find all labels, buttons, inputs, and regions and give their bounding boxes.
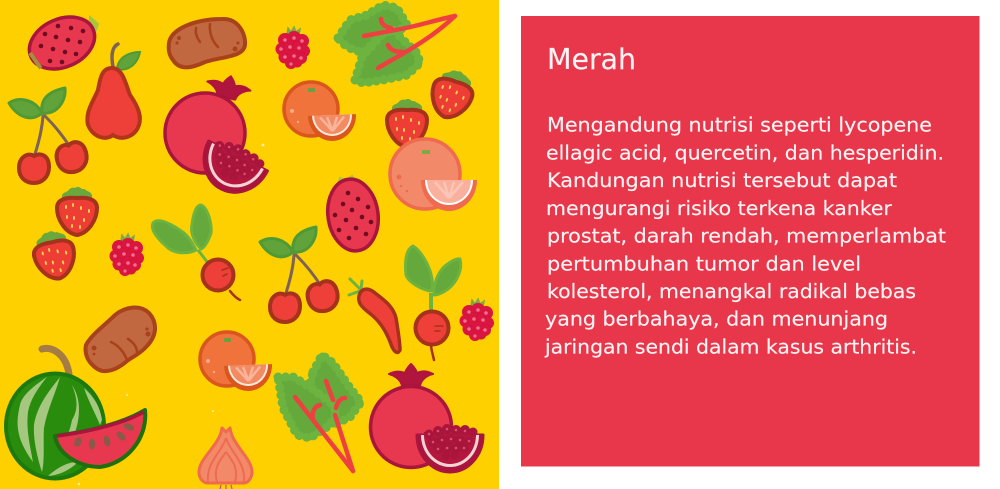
icon: strawberry left upper [57,188,97,235]
icon: pomegranate lower [370,364,483,472]
text block: nutrition description: kolesterol, menangkal radikal bebas [547,280,916,303]
icon: radish left [152,205,240,300]
icon: prickly pear top left [21,7,103,79]
panel: yellow illustration background [0,0,499,489]
text block: nutrition description [544,114,946,358]
icon: orange upper [284,82,357,142]
illustration: fruits and vegetables [6,5,494,489]
icon: strawberry top right [425,66,478,123]
icon: chili pepper [349,279,400,352]
icon: cherries left [9,88,90,183]
icon: pomegranate upper [165,72,272,204]
icon: chard top right [338,5,455,83]
icon: raspberry top [276,27,310,69]
icon: potato top [169,19,245,67]
icon: potato lower [86,307,155,371]
icon: radish right [406,246,461,360]
text block: nutrition description: prostat, darah rendah, memperlambat [547,224,946,248]
icon: watermelon slice [55,410,145,467]
text block: nutrition description: mengurangi risiko terkena kanker [546,197,893,220]
icon: strawberry left lower [30,228,79,283]
icon: orange lower [200,332,273,392]
icon: onion [199,428,252,489]
text block: nutrition description: ellagic acid, quercetin, dan hesperidin. [546,141,944,164]
icon: watermelon [6,348,104,478]
icon: cherries centre [260,227,341,322]
icon: prickly pear centre [323,176,383,254]
text block: nutrition description: jaringan sendi dalam kasus arthritis. [544,335,917,358]
text block: nutrition description: pertumbuhan tumor dan level [547,252,861,276]
icon: raspberry right [460,299,494,341]
text block: nutrition description: yang berbahaya, dan menunjang [545,308,888,331]
panel: red information card [521,16,980,466]
icon: strawberry centre right [387,100,427,147]
text block: nutrition description: Mengandung nutrisi seperti lycopene [547,114,932,137]
icon: chard bottom [278,355,361,471]
icon: raspberry left [110,234,144,276]
text block: nutrition description: Kandungan nutrisi tersebut dapat [547,169,897,192]
icon: grapefruit [390,139,477,211]
icon: pear [87,44,140,138]
heading: Merah: Merah [547,43,636,76]
